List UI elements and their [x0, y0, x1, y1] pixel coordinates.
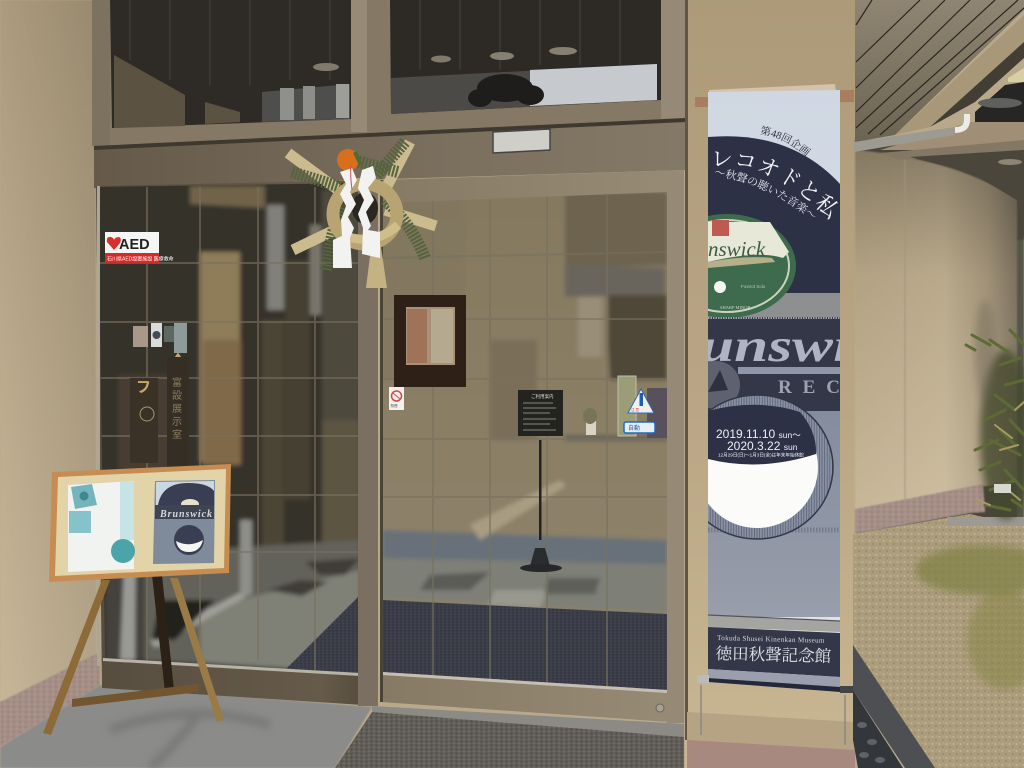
banner: black record [708, 136, 840, 295]
fern leaves [292, 142, 425, 270]
sign: AED: 石川県AED設置施設 医療救命 [107, 256, 174, 262]
hanging straw [366, 240, 387, 288]
door header band [94, 118, 685, 188]
caution triangle sticker [628, 389, 654, 413]
straw ring [333, 184, 398, 244]
sign: exhibition room: 展 [172, 403, 182, 415]
sign: exhibition room: フ [136, 379, 151, 396]
transom window frame [92, 0, 685, 146]
right column [685, 0, 855, 768]
notice stickers [133, 323, 187, 370]
right poster: Brunswick [159, 509, 212, 520]
banner: green record label: SHARP MINOR [720, 305, 750, 310]
left poster [68, 481, 135, 572]
banner: dates [716, 430, 804, 458]
sign: exhibition room: 富 [172, 376, 182, 389]
right door glass interior [380, 190, 670, 695]
curb and pebbles [853, 645, 935, 768]
straw bundles [288, 142, 436, 250]
ceiling eaves [854, 0, 1024, 240]
distant sky and trees [975, 68, 1024, 122]
sign: AED: AED [119, 237, 150, 253]
banner: lower grey area [708, 411, 840, 632]
banner hanger bar [695, 84, 854, 107]
figurine [583, 408, 597, 435]
framed calligraphy [394, 295, 466, 387]
banner: dates: 2019.11.10 sun〜 [716, 427, 801, 441]
paper shide streamers [333, 166, 380, 268]
banner: date oval [708, 405, 816, 464]
banner: dates: 12月29日(日)〜1月3日(金)は年末年始休館 [718, 452, 804, 458]
banner: dark panel with Brunswick lettering: REC [778, 377, 840, 398]
sign: exhibition room: 設 [172, 390, 182, 402]
banner: record ring [708, 396, 834, 540]
banner: subtitle: 〜秋聲の聴いた音楽〜 [715, 169, 816, 216]
banner: green record label [708, 214, 796, 317]
flag on shelf [618, 376, 667, 438]
right poster [153, 480, 215, 564]
banner: dark panel with Brunswick lettering [708, 317, 840, 411]
no smoking sign: 禁煙 [390, 403, 398, 408]
gravel garden with moss [853, 514, 1024, 768]
bamboo plant [966, 300, 1024, 520]
banner: museum names [715, 634, 832, 666]
right door [380, 170, 684, 723]
left wall [0, 0, 100, 768]
banner: bottom museum panel [708, 627, 840, 694]
no smoking sign [389, 387, 404, 410]
transom right window [390, 0, 661, 114]
sign: exhibition room [130, 357, 189, 467]
left door [95, 180, 378, 706]
banner: title: レコオドと私 [715, 152, 838, 220]
banner: dates: 2020.3.22 sun [727, 439, 798, 453]
curved right wall [855, 140, 1024, 540]
banner: dark panel with Brunswick lettering: unswi [700, 320, 850, 372]
banner bottom brackets [697, 675, 853, 745]
sign: exhibition room: 示 [172, 417, 182, 428]
sign: exhibition room: 室 [172, 429, 182, 441]
information board on stand: ご利用案内 [531, 393, 554, 400]
left door glass reflections [95, 180, 365, 680]
auto door sticker: 自動 [628, 424, 640, 432]
transom left window [110, 0, 351, 128]
ground: concrete entrance [0, 685, 372, 768]
banner: museum names: 徳田秋聲記念館 [715, 644, 832, 666]
banner: museum names: Tokuda Shusei Kinenkan Museum [717, 634, 825, 645]
auto door sticker [624, 422, 655, 433]
banner: green record label: Foxtrot Solo [741, 284, 766, 289]
easel [43, 575, 224, 735]
information board on stand [518, 390, 563, 572]
exhibition banner [102, 90, 882, 734]
mandarin orange [337, 149, 361, 171]
caution triangle sticker: 注 意 [631, 407, 639, 412]
gutter pipe [854, 114, 967, 152]
notice board on easel [49, 464, 231, 582]
entrance floor mat [335, 706, 684, 768]
sign: AED [105, 232, 174, 263]
banner: green record label: nswick [708, 237, 766, 261]
shimenawa new year decoration [288, 142, 436, 288]
banner: grey sleeve band [708, 293, 840, 318]
door sensor [493, 129, 550, 153]
